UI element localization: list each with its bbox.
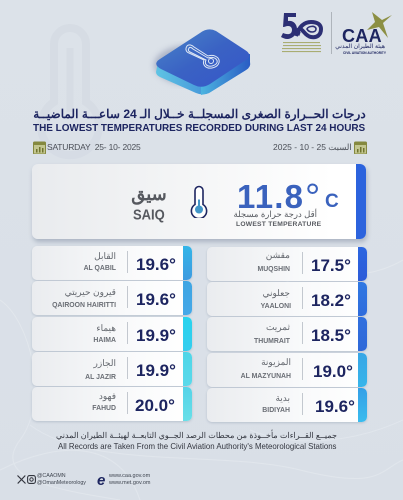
card: Al Qabil — [32, 246, 192, 280]
accent bar — [356, 164, 366, 239]
logo divider — [331, 12, 332, 54]
urls — [109, 473, 150, 486]
card: Haima: 19.9° — [136, 326, 176, 345]
card: Haima — [32, 317, 192, 351]
card: Haima: هيماء — [96, 322, 116, 332]
card: Muqshin — [207, 247, 367, 281]
card: Thumrait: THUMRAIT — [254, 338, 290, 345]
card: Al Jazir: AL JAZIR — [85, 374, 116, 381]
icon: thermometer glyph — [186, 45, 219, 68]
card: Al Qabil: 19.6° — [136, 255, 176, 274]
card: Yaaloni: جعلوني — [262, 288, 290, 298]
card: Bidiyah: 19.6° — [315, 397, 355, 416]
logo: 50th anniversary emblem — [281, 13, 323, 52]
card: Al Jazir — [32, 352, 192, 386]
card: Al Qabil: AL QABIL — [84, 265, 116, 272]
card: Al Mazyunah: AL MAZYUNAH — [241, 373, 291, 380]
card: Al Mazyunah: 19.0° — [313, 362, 353, 381]
card: Fahud: 20.0° — [135, 396, 175, 415]
icon: instagram — [27, 475, 36, 484]
logo: CAA Civil Aviation Authority: CIVIL AVIATION AUTHORITY — [343, 50, 386, 54]
social handles — [17, 473, 86, 486]
panel: lowest temperature SAIQ — [32, 164, 366, 239]
card: Al Mazyunah: المزيونة — [261, 356, 291, 366]
card: Fahud — [32, 387, 192, 421]
card: Fahud: فهود — [99, 390, 116, 400]
card: Muqshin: مقشن — [266, 250, 290, 260]
card: Yaaloni: YAALONI — [261, 303, 291, 310]
card: Thumrait: 18.5° — [311, 326, 351, 345]
logo: CAA Civil Aviation Authority — [335, 12, 392, 54]
urls: www.caa.gov.om — [109, 473, 150, 479]
handles text: @CAAOMN — [37, 473, 66, 479]
card: Fahud: FAHUD — [92, 405, 116, 412]
handles text: @OmanMeteorology — [37, 480, 86, 486]
station name: English: SAIQ — [133, 206, 165, 223]
card: Bidiyah: BIDIYAH — [262, 407, 290, 414]
card: Thumrait — [207, 317, 367, 351]
footnote: Arabic: جميــع القــراءات مأخــوذة من محطات الرصد الجــوي التابعــة لهيئــة الطيران المدني — [56, 431, 337, 440]
station name: Arabic: سيق — [131, 184, 167, 204]
card: Bidiyah: بدية — [275, 392, 290, 402]
icon: calendar left — [33, 142, 46, 154]
icon: calendar right — [354, 142, 367, 154]
footnote: English: All Records are Taken From the Civil Aviation Authority's Meteorological Stations — [58, 442, 336, 451]
card: Qairoon Hairitti: قيرون حيريتي — [65, 286, 116, 296]
card: Muqshin: 17.5° — [311, 256, 351, 275]
logo: CAA Civil Aviation Authority: CAA — [342, 26, 382, 46]
card: Thumrait: ثمريت — [266, 322, 290, 332]
unit: C — [325, 191, 339, 212]
card: Qairoon Hairitti: QAIROON HAIRITTI — [52, 302, 116, 309]
card: Al Jazir: الجازر — [94, 358, 116, 368]
footnote — [56, 430, 337, 451]
urls: www.met.gov.om — [109, 480, 150, 486]
value: 11.8: 11.8 — [237, 178, 304, 214]
card: Yaaloni — [207, 282, 367, 316]
card: Qairoon Hairitti: 19.6° — [136, 290, 176, 309]
card: Al Qabil: القابل — [94, 250, 116, 260]
icon: blue isometric thermometer key — [152, 29, 250, 95]
date: Arabic: 2025 - 10 - 25 السبت — [273, 142, 352, 152]
caption: Arabic: أقل درجة حرارة مسجلة — [233, 209, 317, 219]
card: Yaaloni: 18.2° — [311, 291, 351, 310]
icon: web e: e — [97, 472, 105, 489]
heading: English: THE LOWEST TEMPERATURES RECORDED DURING LAST 24 HOURS — [33, 123, 365, 134]
heading: Arabic: درجات الحــرارة الصغرى المسجلــة خــلال الـ 24 ساعـــة الماضيــة — [33, 107, 366, 121]
caption: English: LOWEST TEMPERATURE — [236, 221, 321, 228]
card: Qairoon Hairitti — [32, 281, 192, 315]
icon: thermometer — [190, 186, 208, 218]
icon: X — [17, 475, 26, 484]
degree sign: ° — [305, 177, 320, 219]
heading — [33, 107, 366, 134]
card: Muqshin: MUQSHIN — [257, 266, 290, 273]
date: English: SATURDAY 25- 10- 2025 — [47, 142, 141, 152]
card: Al Jazir: 19.9° — [136, 361, 176, 380]
handles text — [37, 473, 86, 486]
website links — [97, 472, 150, 489]
card: Al Mazyunah — [207, 353, 367, 387]
card: Haima: HAIMA — [93, 337, 116, 344]
logo: CAA Civil Aviation Authority: هيئة الطيران المدني — [335, 44, 385, 50]
card: Bidiyah — [207, 388, 367, 422]
